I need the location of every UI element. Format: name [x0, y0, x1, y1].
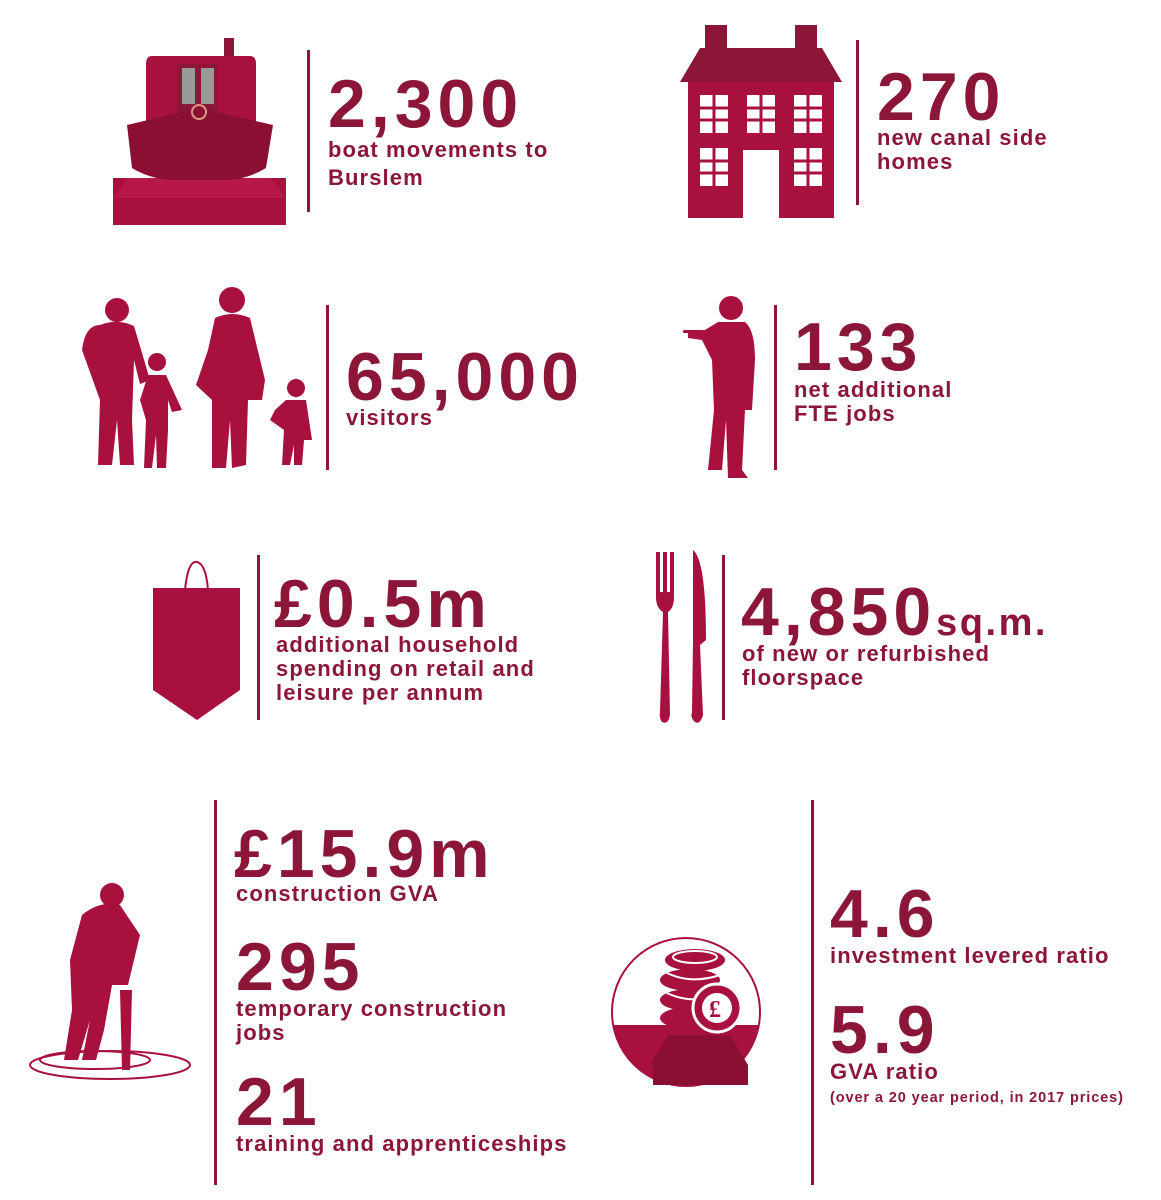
stat: homes: [680, 25, 1048, 218]
stat: visitors: visitors: [346, 405, 433, 430]
stat: boat movements: [113, 38, 548, 225]
stat: boat movements: boat movements to: [328, 137, 548, 162]
stat: construction: 21: [236, 1064, 322, 1140]
stat: ratios: (over a 20 year period, in 2017 prices): [830, 1090, 1124, 1106]
stat: floorspace: 4,850sq.m.: [741, 574, 1048, 650]
stat: construction: £15.9m: [234, 816, 495, 892]
stat: boat movements: Burslem: [328, 165, 424, 190]
stat: homes: homes: [877, 149, 953, 174]
stat: ratios: [610, 800, 1124, 1185]
stat: ratios: 4.6: [830, 876, 940, 952]
stat: jobs: FTE jobs: [794, 401, 896, 426]
icon: construction worker: [30, 883, 190, 1079]
stat: floorspace: [656, 550, 1048, 723]
icon: fork and knife: [656, 550, 706, 723]
stat: construction: jobs: [235, 1020, 286, 1045]
stat: visitors: [82, 287, 584, 470]
icon: waiter: [683, 296, 755, 478]
stat: floorspace: floorspace: [742, 665, 864, 690]
stat: visitors: 65,000: [346, 339, 584, 415]
stat: construction: [30, 800, 568, 1185]
stat: spending: spending on retail and: [276, 656, 535, 681]
stat: ratios: 5.9: [830, 992, 940, 1068]
icon: house: [680, 25, 842, 218]
stat: construction: 295: [236, 929, 364, 1005]
stat: construction: construction GVA: [236, 881, 439, 906]
icon: shopping bag: [153, 562, 240, 720]
stat: homes: 270: [877, 59, 1005, 135]
stat: spending: £0.5m: [274, 566, 492, 642]
stat: jobs: net additional: [794, 377, 952, 402]
stat: homes: new canal side: [877, 125, 1048, 150]
stat: construction: temporary construction: [236, 996, 507, 1021]
icon: coins in circle: £: [709, 997, 721, 1023]
stat: jobs: 133: [794, 309, 922, 385]
icon: coins in circle: [610, 938, 762, 1095]
icon: family silhouettes: [82, 287, 312, 468]
stat: construction: training and apprenticeships: [236, 1131, 568, 1156]
icon: narrowboat: [113, 38, 286, 225]
stat: boat movements: 2,300: [328, 66, 523, 142]
stat: spending: leisure per annum: [276, 680, 484, 705]
stat: spending: [153, 555, 535, 720]
stat: spending: additional household: [276, 632, 519, 657]
stat: jobs: [683, 296, 952, 478]
stat: ratios: GVA ratio: [830, 1059, 939, 1084]
stat: floorspace: of new or refurbished: [742, 641, 990, 666]
stat: ratios: investment levered ratio: [830, 943, 1110, 968]
